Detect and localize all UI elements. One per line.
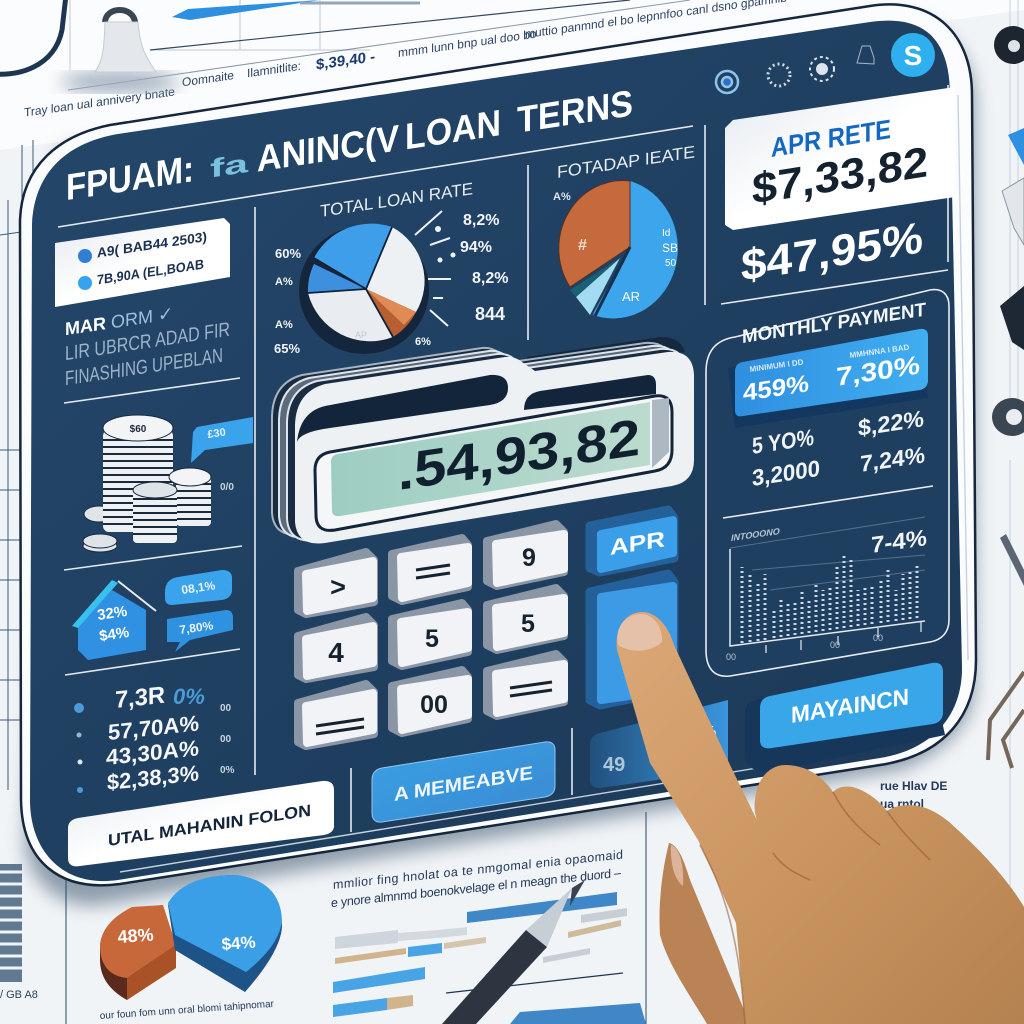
coin: loose — [83, 534, 117, 552]
bottom pie chart: 48% — [117, 925, 154, 947]
pie leader lines and values: A% — [275, 319, 293, 331]
top document caption text: Ilamnitlite: — [247, 59, 301, 80]
key: APR: APR — [610, 526, 665, 560]
left text block: MAR ORM ✓ — [65, 303, 173, 339]
callout pills — [165, 570, 233, 652]
left text block: FINASHING UPEBLAN — [65, 345, 223, 390]
payment history chart: 00 — [726, 652, 736, 662]
button: percent — [590, 700, 728, 788]
icon: gear two — [810, 57, 834, 81]
finger creases — [700, 792, 930, 1024]
APR rate card: $7,33,82 — [752, 138, 928, 214]
pie chart: fotadap rate — [553, 181, 678, 318]
pie leader lines and values: 8,2% — [472, 270, 508, 287]
icon: target — [716, 71, 738, 93]
icon: house: 32% — [96, 603, 128, 624]
left text block: LIR UBRCR ADAD FIR — [65, 319, 230, 365]
top document caption text: Tray loan ual annivery bnate — [24, 84, 175, 120]
panel title: FPUAM: — [66, 147, 194, 208]
stack: right — [169, 468, 211, 526]
top document caption text: Oomnaite — [182, 68, 234, 89]
key: APR — [590, 510, 674, 572]
callout pills: 7,80% — [178, 618, 214, 637]
pie leader lines and values: 94% — [460, 239, 492, 256]
button: percent: % — [702, 724, 716, 741]
payment history chart: 7-4% — [871, 524, 927, 558]
key: equals two — [298, 684, 374, 746]
icon: fountain pen — [442, 880, 585, 1024]
rate list: 7,3R — [115, 682, 165, 714]
pie chart: fotadap rate: # — [578, 237, 587, 254]
section dividers — [58, 85, 948, 832]
payment history chart: 00 — [830, 640, 840, 650]
icon: shield outline — [857, 46, 874, 64]
icon: washer — [992, 398, 1024, 436]
bottom document text: e ynore almnmd boenokvelage el n meagn the duord – — [331, 866, 621, 910]
side document text right: rue Hlav DE — [880, 779, 947, 793]
payment values: 5 YO% — [752, 424, 814, 459]
icon: desk bell — [60, 10, 180, 92]
bottom document text: mmlior fing hnolat oa te nmgomal enia opaomaid — [333, 848, 623, 892]
calculator display — [315, 396, 672, 530]
key: equals three — [487, 654, 564, 716]
top document caption text: mmm lunn bnp ual doo bo — [398, 27, 537, 60]
pie leader lines and values: 844 — [475, 304, 505, 324]
payment values — [752, 405, 925, 491]
callout: coin bubble — [191, 417, 253, 463]
icon: blue pen top — [172, 0, 420, 20]
panel title: ANINC(V — [257, 117, 399, 180]
rate list: $2,38,3% — [107, 760, 199, 795]
stack: large: $60 — [130, 424, 147, 435]
pie leader lines and values: A% — [275, 276, 293, 288]
payment highlight box: MMHNNA I BAD — [849, 343, 910, 360]
thumb — [659, 843, 750, 1024]
grid sheet — [1010, 0, 1018, 1000]
bottom document — [66, 812, 646, 1024]
key: nine — [487, 524, 564, 586]
bottom pie chart: $4% — [221, 933, 256, 954]
calculator display: .54,93,82 — [398, 409, 640, 502]
icon: house: $4% — [98, 624, 130, 645]
payment highlight box — [728, 329, 928, 428]
left sheet caption: / GB A8 — [0, 989, 38, 1001]
pie label: fotadap rate: FOTADAP IEATE — [557, 142, 695, 182]
key: five two — [487, 588, 564, 650]
top document caption text — [24, 0, 787, 120]
icon: house — [72, 580, 156, 660]
rate list: 00 — [220, 734, 232, 745]
fingernail — [617, 614, 662, 651]
bottom bar chart — [333, 892, 646, 1024]
list bullets — [74, 703, 84, 793]
payment values: 3,2000 — [752, 455, 820, 491]
key: four — [298, 617, 374, 679]
calculator — [272, 337, 694, 746]
monthly payment panel: MONTHLY PAYMENT — [742, 300, 926, 348]
palm and fingers — [617, 612, 1024, 1024]
side document text right: ua rntol — [880, 797, 924, 811]
legend dots — [78, 249, 92, 290]
key: five one — [392, 603, 468, 666]
side document text right — [880, 779, 947, 811]
icon: glasses — [0, 0, 66, 74]
header icons — [716, 33, 935, 93]
pie leader lines and values: 6% — [415, 336, 431, 348]
key: equals one — [392, 538, 468, 601]
rate list: 0% — [173, 684, 205, 709]
donut label: total loan rate: TOTAL LOAN RATE — [320, 179, 473, 221]
icon: blue card — [1008, 128, 1024, 165]
button: mayaincn — [745, 663, 945, 772]
left text block — [65, 295, 230, 390]
background document: top strip — [0, 0, 1024, 150]
headline value: $47,95% — [741, 213, 923, 291]
payment values: 7,24% — [860, 441, 925, 477]
coin stacks — [83, 415, 211, 552]
key: five one: 5 — [425, 625, 439, 653]
panel title — [66, 82, 633, 208]
icon: dollar badge — [891, 33, 935, 77]
button: total maximum: UTAL MAHANIN FOLON — [108, 801, 311, 850]
rate list: 0% — [220, 765, 235, 776]
icon: black clip — [1000, 286, 1024, 350]
monthly payment panel — [706, 290, 949, 676]
payment history chart: INTOOONO — [731, 526, 780, 543]
pie leader lines and values: 8,2% — [463, 212, 499, 229]
hand pointing — [617, 612, 1024, 1024]
title logo chip: fa — [210, 148, 249, 184]
pie chart: total loan rate — [299, 224, 429, 354]
stack: front — [133, 482, 177, 543]
rate list: 00 — [220, 703, 232, 714]
panel title: TERNS — [517, 82, 633, 141]
button: mayaincn: MAYAINCN — [791, 683, 909, 728]
icon: gear one — [768, 64, 790, 86]
top document caption text: $,39,40 - — [316, 48, 375, 74]
panel title: LOAN — [405, 101, 501, 157]
payment values: $,22% — [858, 405, 924, 441]
icon: divider tool — [1000, 534, 1024, 586]
rate list: 43,30A% — [106, 735, 199, 770]
rate list — [74, 682, 235, 795]
coin: small — [84, 506, 114, 522]
calculator shadow plate — [527, 337, 685, 374]
bottom caption: our foun fom unn oral blomi tahipnomar — [99, 999, 275, 1022]
background grid sheet: left — [0, 140, 35, 982]
payment highlight box: MINIMUM I DD — [749, 357, 804, 374]
APR rate card: APR RETE — [771, 113, 891, 163]
pie chart: fotadap rate: Id — [662, 228, 670, 239]
icon: ring — [994, 26, 1024, 64]
legend box: 7B,90A (EL,BOAB — [97, 257, 204, 287]
keypad — [298, 510, 674, 746]
button: percent: 49 — [603, 754, 625, 776]
pie chart: fotadap rate: AR — [622, 289, 640, 304]
pie leader lines and values: 65% — [274, 341, 300, 356]
button: a memeabve — [372, 742, 555, 822]
callout: coin bubble: £30 — [207, 427, 227, 441]
right side desk items — [988, 0, 1024, 1000]
icon: compass — [988, 672, 1024, 768]
icon: paper card — [1002, 178, 1024, 245]
rate list: 57,70A% — [108, 710, 199, 745]
key: greater: > — [330, 572, 346, 602]
pie chart: total loan rate: AP — [355, 330, 367, 340]
APR rate card — [725, 87, 955, 230]
payment highlight box: 7,30% — [836, 350, 920, 392]
key: four: 4 — [328, 637, 344, 668]
key: large blue — [590, 574, 674, 705]
button: a memeabve: A MEMEABVE — [394, 763, 533, 806]
key: five two: 5 — [521, 610, 535, 638]
pie chart: fotadap rate: A% — [553, 191, 571, 203]
main dark panel — [30, 21, 962, 881]
pie chart: fotadap rate: 50 — [665, 258, 677, 269]
callout pills: 08,1% — [180, 578, 216, 597]
calculator top slots — [297, 375, 656, 442]
legend box: A9( BAB44 2503) — [97, 229, 207, 260]
key: double zero: 00 — [420, 691, 448, 719]
key: double zero — [392, 670, 468, 733]
coin side label: 0/0 — [220, 482, 234, 493]
bottom pie chart — [100, 875, 282, 1000]
pie leader lines and values: 60% — [275, 246, 301, 261]
calculator body stack — [272, 343, 694, 544]
button: total maximum — [68, 781, 334, 866]
legend box — [55, 218, 230, 307]
payment history chart — [726, 517, 927, 662]
pie chart: fotadap rate: SB — [662, 241, 678, 255]
payment history chart: 00 — [873, 633, 883, 643]
key: greater — [298, 552, 374, 614]
icon: dollar badge: S — [904, 40, 922, 71]
payment highlight box: 459% — [743, 370, 809, 407]
key: nine: 9 — [522, 544, 536, 572]
pie leader lines and values — [274, 211, 508, 356]
